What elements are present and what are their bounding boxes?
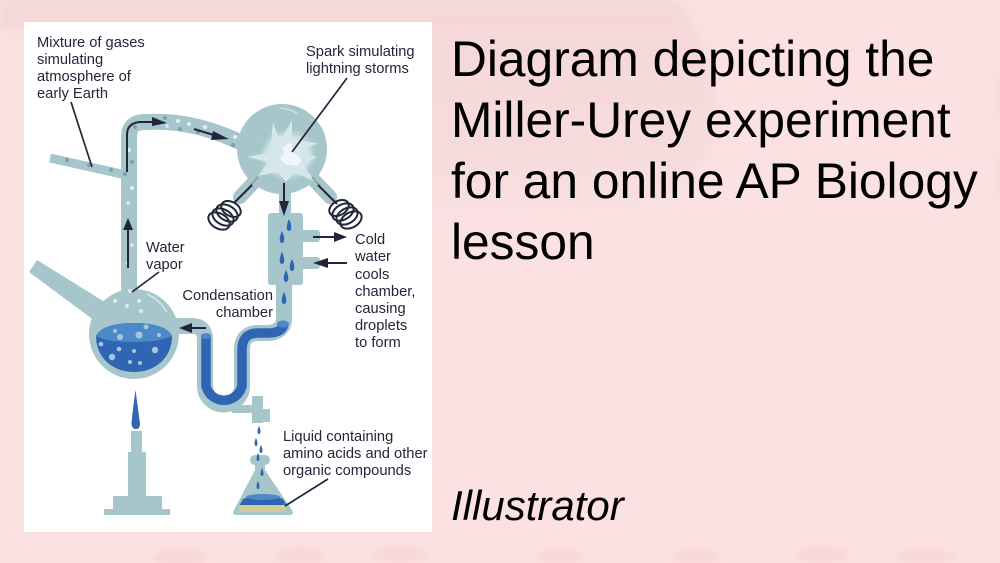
title — [451, 31, 978, 270]
burner flame — [132, 390, 140, 429]
label: cold water: droplets — [355, 318, 407, 334]
title: lesson — [451, 214, 595, 270]
title: for an online AP Biology — [451, 153, 978, 209]
label: mixture of gases: Mixture of gases — [37, 35, 145, 51]
label: mixture of gases: atmosphere of — [37, 69, 132, 85]
label: cold water: causing — [355, 301, 406, 317]
water droplets — [254, 219, 294, 489]
label: water vapor: Water — [146, 240, 185, 256]
condensation chamber and U-tube — [172, 185, 320, 405]
label: condensation chamber: chamber — [216, 305, 273, 321]
label: water vapor: vapor — [146, 257, 183, 273]
burner — [104, 431, 170, 515]
label: liquid: amino acids and other — [283, 446, 428, 462]
label: cold water: Cold — [355, 232, 385, 248]
label: liquid: organic compounds — [283, 463, 411, 479]
label: cold water: to form — [355, 335, 401, 351]
label: cold water: chamber, — [355, 284, 415, 300]
title: Diagram depicting the — [451, 31, 934, 87]
glass tubing: gas inlet and upper tube — [50, 122, 242, 300]
label: condensation chamber: Condensation — [182, 288, 273, 304]
label: mixture of gases: simulating — [37, 52, 103, 68]
gas particles — [65, 116, 237, 205]
electrode coils — [205, 185, 365, 233]
label: cold water: water — [354, 249, 391, 265]
title: Miller-Urey experiment — [451, 92, 951, 148]
stopcock — [232, 396, 270, 423]
boiling flask — [29, 243, 179, 379]
label: cold water: cools — [355, 267, 389, 283]
flow arrows — [127, 122, 347, 328]
collection flask — [233, 455, 293, 515]
label: liquid: Liquid containing — [283, 429, 393, 445]
label: spark: Spark simulating — [306, 44, 415, 60]
spark flask — [237, 104, 330, 197]
leader lines — [71, 78, 347, 506]
credit: Illustrator — [451, 482, 624, 529]
panel background — [24, 22, 432, 532]
label: mixture of gases: early Earth — [37, 86, 108, 102]
label: spark: lightning storms — [306, 61, 409, 77]
